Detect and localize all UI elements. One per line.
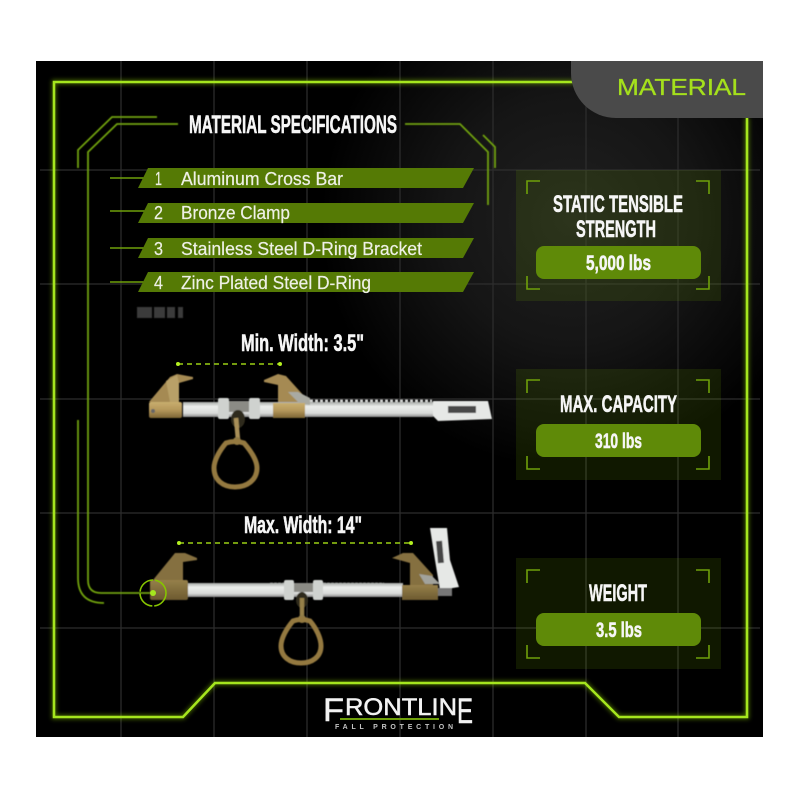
panel: max capacity: MAX. CAPACITY (560, 391, 677, 418)
logo: frontline: E (457, 692, 473, 731)
list item 4 (110, 272, 474, 293)
list item 3: 3 (154, 239, 163, 259)
bracket lines around heading and leader to target (78, 117, 495, 603)
list item 1: Aluminum Cross Bar (181, 169, 343, 189)
product: anchor at maximum width (150, 528, 459, 663)
panel: static tensible strength (516, 170, 721, 301)
decorative squares (137, 307, 183, 318)
logo: frontline: FALL PROTECTION (335, 724, 453, 731)
logo: frontline (323, 692, 473, 731)
tab: material: MATERIAL (617, 74, 746, 100)
list item 1: 1 (155, 169, 162, 189)
panel: weight (516, 558, 721, 669)
list item 3: Stainless Steel D-Ring Bracket (181, 239, 422, 259)
panel: weight: 3.5 lbs (596, 619, 642, 642)
panel: weight: WEIGHT (589, 580, 647, 607)
heading: material specifications: MATERIAL SPECIFICATIONS (189, 111, 397, 139)
dimension line: min width (176, 362, 282, 366)
list item 4: 4 (154, 273, 163, 293)
panel: max capacity (516, 369, 721, 480)
tab: material (571, 61, 763, 118)
panel: static tensible strength: STRENGTH (576, 216, 656, 243)
label: min width: Min. Width: 3.5" (241, 330, 364, 357)
list item 2: 2 (154, 203, 163, 223)
neon frame (54, 82, 747, 717)
list item 2: Bronze Clamp (181, 203, 290, 223)
material list (110, 168, 474, 293)
list item 4: Zinc Plated Steel D-Ring (181, 273, 371, 293)
label: max width: Max. Width: 14" (244, 512, 362, 539)
panel: static tensible strength: STATIC TENSIBLE (553, 191, 683, 218)
list item 3 (110, 238, 474, 259)
list item 1 (110, 168, 474, 189)
logo: frontline: RONTLIN (345, 694, 457, 721)
dimension line: max width (177, 541, 413, 545)
product: anchor at minimum width (149, 374, 492, 487)
background panel (36, 61, 763, 737)
list item 2 (110, 203, 474, 223)
logo: frontline: F (323, 692, 344, 728)
target marker (140, 580, 166, 606)
panel: max capacity: 310 lbs (595, 430, 642, 453)
panel: static tensible strength: 5,000 lbs (586, 252, 651, 275)
